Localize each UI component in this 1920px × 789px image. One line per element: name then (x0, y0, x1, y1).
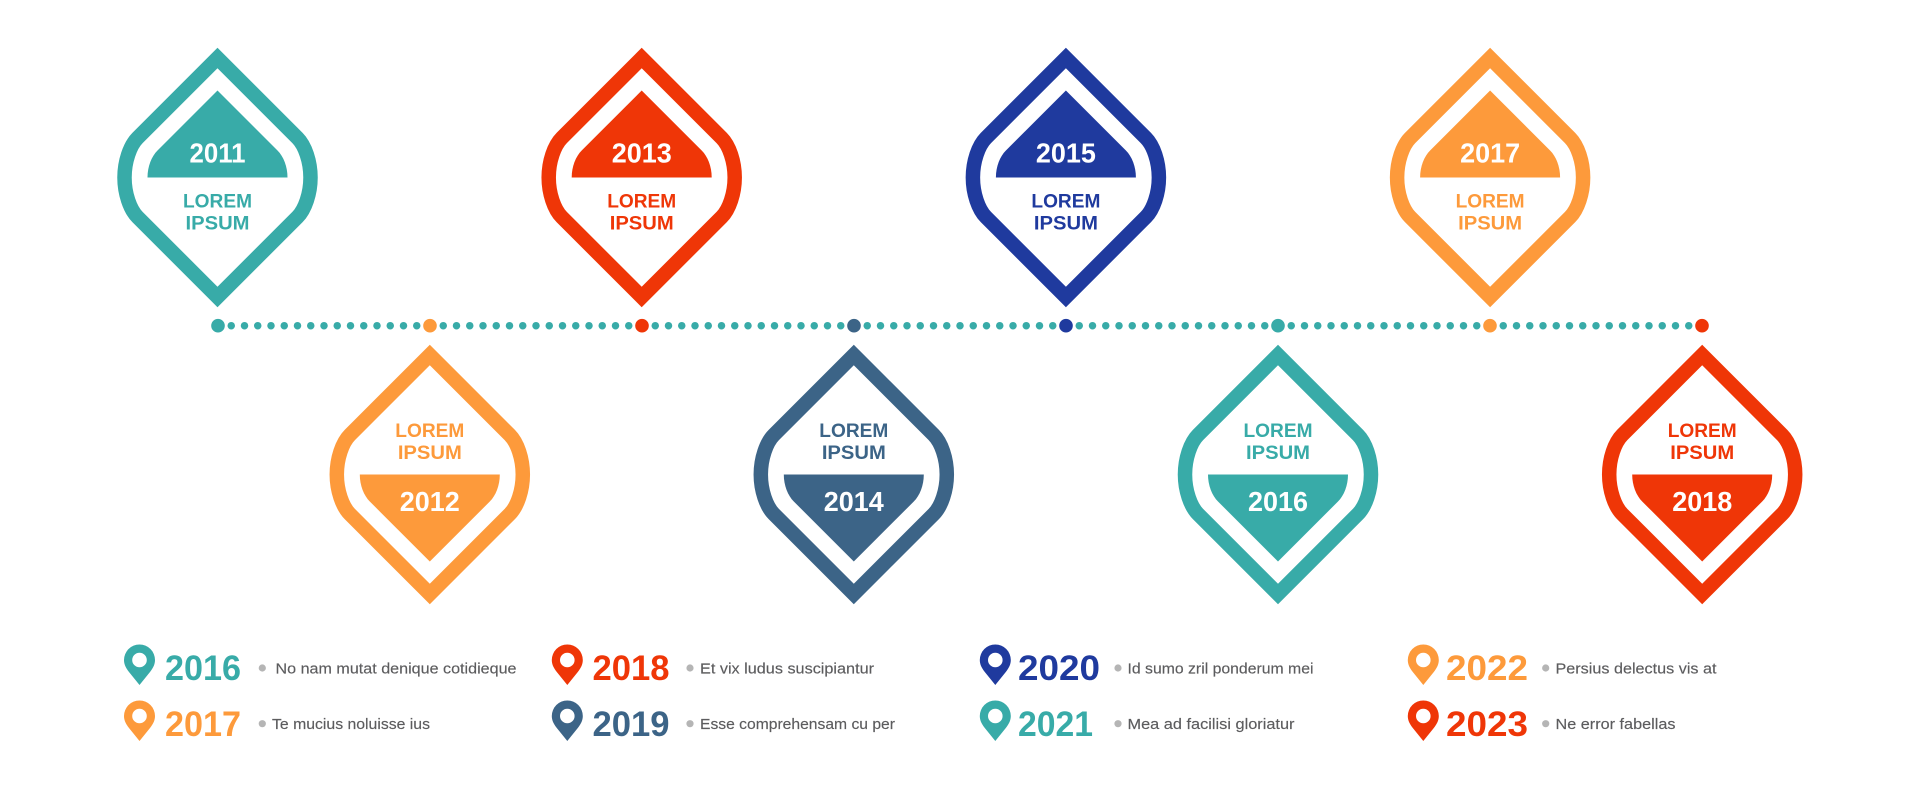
legend item: 2019: 2019 (592, 704, 670, 744)
marker: 2015: LOREM (1031, 190, 1100, 212)
legend item: 2016: 2016 (165, 648, 241, 688)
marker: 2012 (337, 355, 523, 594)
marker: 2012: LOREM (395, 420, 464, 442)
legend item: 2023 (1408, 700, 1676, 744)
legend item: 2018: 2018 (592, 648, 670, 688)
legend item: 2018: Et vix ludus suscipiantur (700, 660, 874, 677)
legend item: 2022 (1408, 644, 1717, 688)
marker: 2014: LOREM (819, 420, 888, 442)
marker: 2011: IPSUM (186, 212, 249, 234)
legend item: 2019 (552, 700, 895, 744)
marker: 2012: IPSUM (398, 442, 462, 464)
legend item: 2018 (552, 644, 874, 688)
marker: 2017: 2017 (1460, 138, 1520, 169)
legend item: 2022: 2022 (1446, 648, 1528, 688)
marker: 2011: 2011 (190, 138, 246, 169)
marker: 2014: 2014 (824, 486, 884, 517)
marker: 2016: IPSUM (1246, 442, 1310, 464)
marker: 2013 (549, 58, 735, 297)
marker: 2012: 2012 (400, 486, 460, 517)
marker: 2013: 2013 (612, 138, 672, 169)
legend item: 2020: Id sumo zril ponderum mei (1128, 660, 1314, 677)
marker: 2014: IPSUM (822, 442, 886, 464)
marker: 2016: 2016 (1248, 486, 1308, 517)
marker: 2013: LOREM (607, 190, 676, 212)
legend item: 2023: 2023 (1446, 704, 1528, 744)
marker: 2018 (1609, 355, 1795, 594)
marker: 2014 (761, 355, 947, 594)
marker: 2016: LOREM (1244, 420, 1312, 442)
marker: 2015 (973, 58, 1159, 297)
marker: 2017: LOREM (1456, 190, 1525, 212)
marker: 2017 (1397, 58, 1583, 297)
marker: 2011: LOREM (183, 190, 252, 212)
legend item: 2021: Mea ad facilisi gloriatur (1128, 716, 1294, 733)
legend item: 2021: 2021 (1018, 704, 1093, 744)
legend item: 2016 (124, 644, 516, 688)
legend item: 2020 (980, 644, 1314, 688)
legend item: 2017 (124, 700, 430, 744)
marker: 2018: IPSUM (1670, 442, 1734, 464)
legend item: 2017: Te mucius noluisse ius (272, 716, 430, 733)
legend item: 2019: Esse comprehensam cu per (700, 716, 895, 733)
marker: 2017: IPSUM (1458, 212, 1522, 234)
legend item: 2016: No nam mutat denique cotidieque (276, 660, 516, 677)
legend item: 2017: 2017 (165, 704, 241, 744)
dotted timeline (211, 319, 1709, 333)
marker: 2018: LOREM (1668, 420, 1737, 442)
legend item: 2022: Persius delectus vis at (1556, 660, 1717, 677)
marker: 2018: 2018 (1672, 486, 1732, 517)
marker: 2016 (1185, 355, 1371, 594)
legend item: 2023: Ne error fabellas (1556, 716, 1676, 733)
legend item: 2021 (980, 700, 1294, 744)
legend item: 2020: 2020 (1018, 648, 1100, 688)
marker: 2011 (124, 58, 310, 297)
marker: 2015: 2015 (1036, 138, 1096, 169)
marker: 2015: IPSUM (1034, 212, 1098, 234)
marker: 2013: IPSUM (610, 212, 674, 234)
